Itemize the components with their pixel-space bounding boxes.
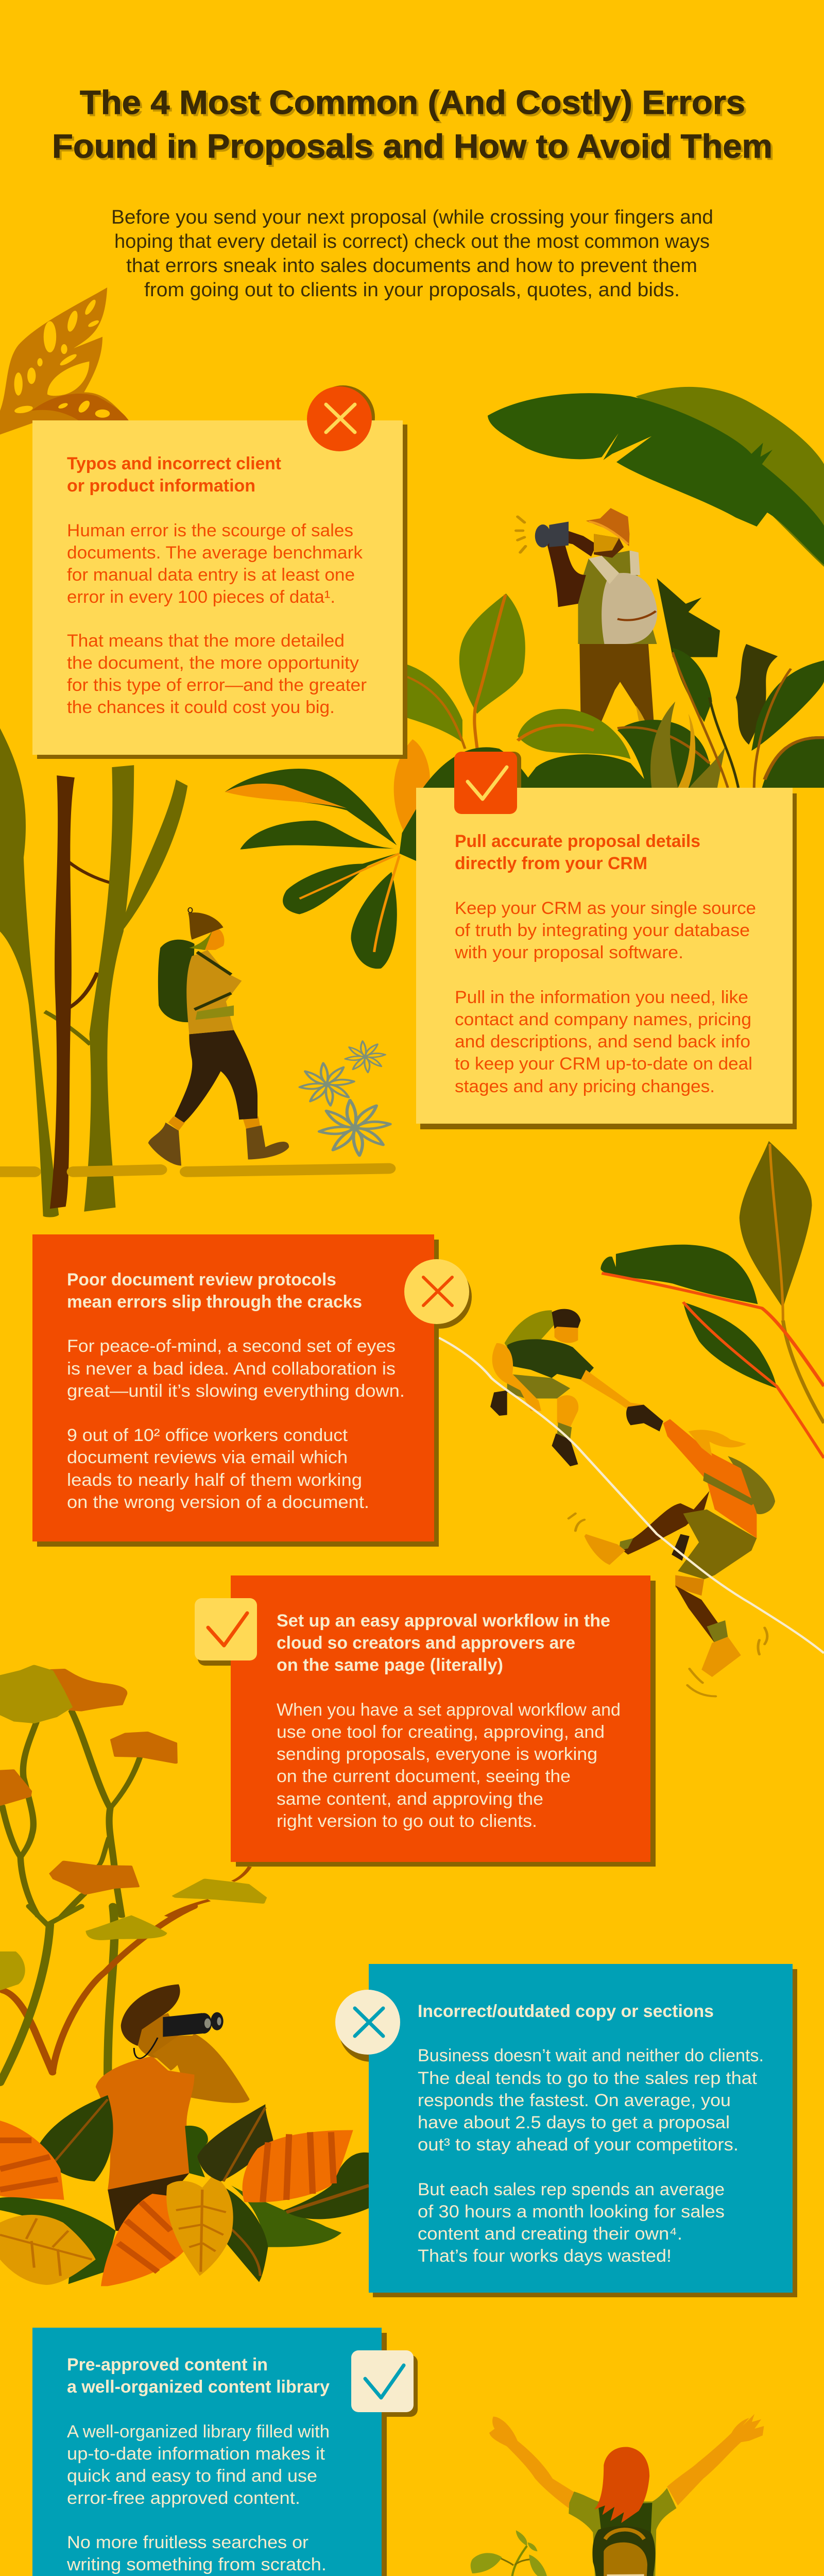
illustration: ground line and small plants [0, 1041, 390, 1172]
title [52, 83, 772, 165]
card text: CRM: stages and any pricing changes. [455, 1077, 715, 1096]
illustration: hiker with backpack [148, 908, 289, 1165]
intro paragraph [111, 207, 713, 301]
card text: document review: leads to nearly half of them working [67, 1470, 362, 1490]
card text: content library: a well-organized content library [67, 2377, 330, 2397]
card text: CRM: to keep your CRM up-to-date on deal [455, 1054, 752, 1074]
card text: CRM: directly from your CRM [455, 854, 647, 873]
panel: approval workflow solution card [195, 1575, 656, 1867]
card text: document review: 9 out of 10² office workers conduct [67, 1426, 348, 1445]
panel: outdated copy error card [335, 1964, 797, 2297]
card text: content library: No more fruitless searches or [67, 2533, 308, 2552]
intro paragraph: from going out to clients in your proposals, quotes, and bids. [144, 279, 680, 301]
card text: document review [67, 1270, 405, 1512]
icon: error cross [335, 1990, 400, 2055]
card text: approval workflow: When you have a set approval workflow and [277, 1700, 621, 1720]
card text: document review: For peace-of-mind, a second set of eyes [67, 1336, 396, 1356]
card text: typos: for manual data entry is at least one [67, 565, 355, 585]
illustration: trees on the left [0, 728, 187, 1217]
icon: check mark [195, 1598, 257, 1660]
intro paragraph: hoping that every detail is correct) check out the most common ways [114, 231, 710, 252]
card text: document review: on the wrong version of a document. [67, 1493, 369, 1512]
illustration: leaves top right of climbers [600, 1141, 824, 1458]
illustration: jungle plants behind CRM card [394, 594, 824, 833]
card text: content library [66, 2355, 330, 2574]
title: Found in Proposals and How to Avoid Them [52, 127, 772, 165]
illustration: climbers helping each other [439, 1309, 824, 1697]
card text: CRM: of truth by integrating your database [455, 921, 750, 940]
icon: error cross [404, 1259, 469, 1324]
card text: typos: or product information [67, 476, 255, 496]
card text: CRM: with your proposal software. [454, 943, 683, 962]
illustration: banana leaves top right [488, 387, 824, 567]
card text: content library: quick and easy to find and use [67, 2466, 317, 2486]
card text: approval workflow: Set up an easy approval workflow in the [277, 1611, 610, 1631]
card text: typos: Typos and incorrect client [67, 454, 281, 473]
card text: outdated copy: But each sales rep spends an average [418, 2180, 725, 2199]
illustration: mushroom plants [0, 1666, 265, 1917]
card text: document review: document reviews via email which [67, 1448, 348, 1467]
card text: approval workflow: sending proposals, everyone is working [277, 1744, 597, 1764]
card text: approval workflow [277, 1611, 621, 1831]
card text: outdated copy: out³ to stay ahead of your competitors. [418, 2135, 739, 2155]
card text: CRM: Keep your CRM as your single source [455, 899, 756, 918]
card text: CRM: Pull in the information you need, like [455, 988, 748, 1007]
card text: CRM: Pull accurate proposal details [455, 832, 700, 851]
card text: approval workflow: use one tool for creating, approving, and [277, 1722, 605, 1742]
card text: outdated copy: responds the fastest. On average, you [418, 2091, 731, 2110]
icon: monstera leaf top left [0, 287, 129, 434]
card text: content library: error-free approved content. [67, 2488, 300, 2508]
card text: content library: Pre-approved content in [67, 2355, 268, 2375]
card text: document review: Poor document review protocols [67, 1270, 336, 1290]
card text: typos: Human error is the scourge of sales [67, 521, 353, 540]
card text: outdated copy: Business doesn’t wait and neither do clients. [418, 2046, 764, 2065]
title: The 4 Most Common (And Costly) Errors [80, 83, 745, 121]
card text: approval workflow: on the current document, seeing the [277, 1767, 571, 1786]
card text: outdated copy: The deal tends to go to the sales rep that [418, 2069, 758, 2088]
card text: outdated copy: That’s four works days wasted! [418, 2246, 672, 2266]
illustration: man with binoculars among leaves [0, 1906, 369, 2286]
card text: content library: up-to-date information makes it [67, 2444, 325, 2464]
card text: CRM: contact and company names, pricing [455, 1010, 751, 1029]
card text: document review: mean errors slip through the cracks [67, 1292, 362, 1312]
card text: outdated copy [418, 2002, 764, 2266]
card text: CRM [454, 832, 756, 1096]
card text: outdated copy: content and creating their own⁴. [418, 2224, 682, 2244]
card text: content library: writing something from scratch. [66, 2555, 327, 2574]
card text: typos: documents. The average benchmark [67, 543, 363, 563]
icon: check mark [351, 2350, 414, 2412]
panel: content library solution card [32, 2328, 418, 2576]
card text: typos: error in every 100 pieces of data¹. [67, 587, 335, 607]
card text: outdated copy: Incorrect/outdated copy or sections [418, 2002, 714, 2021]
icon: check mark [454, 752, 517, 814]
card text: typos: the document, the more opportunity [67, 653, 359, 673]
icon: error cross [307, 386, 372, 451]
card text: typos: That means that the more detailed [67, 631, 345, 651]
intro paragraph: that errors sneak into sales documents and how to prevent them [126, 255, 697, 277]
card text: approval workflow: cloud so creators and approvers are [277, 1633, 575, 1653]
card text: content library: A well-organized library filled with [67, 2422, 330, 2442]
panel: typos error card [32, 385, 407, 759]
card text: outdated copy: of 30 hours a month looking for sales [418, 2202, 725, 2222]
card text: typos: the chances it could cost you big. [67, 698, 335, 717]
card text: document review: great—until it’s slowing everything down. [67, 1381, 405, 1401]
card text: typos [67, 454, 367, 717]
panel: CRM solution card [416, 752, 797, 1129]
card text: approval workflow: same content, and approving the [277, 1789, 543, 1809]
intro paragraph: Before you send your next proposal (while crossing your fingers and [111, 207, 713, 228]
card text: approval workflow: right version to go out to clients. [277, 1811, 537, 1831]
card text: approval workflow: on the same page (literally) [277, 1655, 503, 1675]
illustration: explorer with camera [516, 508, 720, 781]
card text: typos: for this type of error—and the greater [67, 675, 367, 695]
card text: CRM: and descriptions, and send back info [455, 1032, 750, 1052]
card text: document review: is never a bad idea. And collaboration is [67, 1359, 396, 1379]
illustration: woman with raised arms and sprout [406, 2414, 824, 2576]
panel: document review error card [32, 1234, 472, 1547]
illustration: tropical leaf cluster left of CRM card [225, 769, 418, 969]
card text: outdated copy: have about 2.5 days to get a proposal [418, 2113, 730, 2132]
